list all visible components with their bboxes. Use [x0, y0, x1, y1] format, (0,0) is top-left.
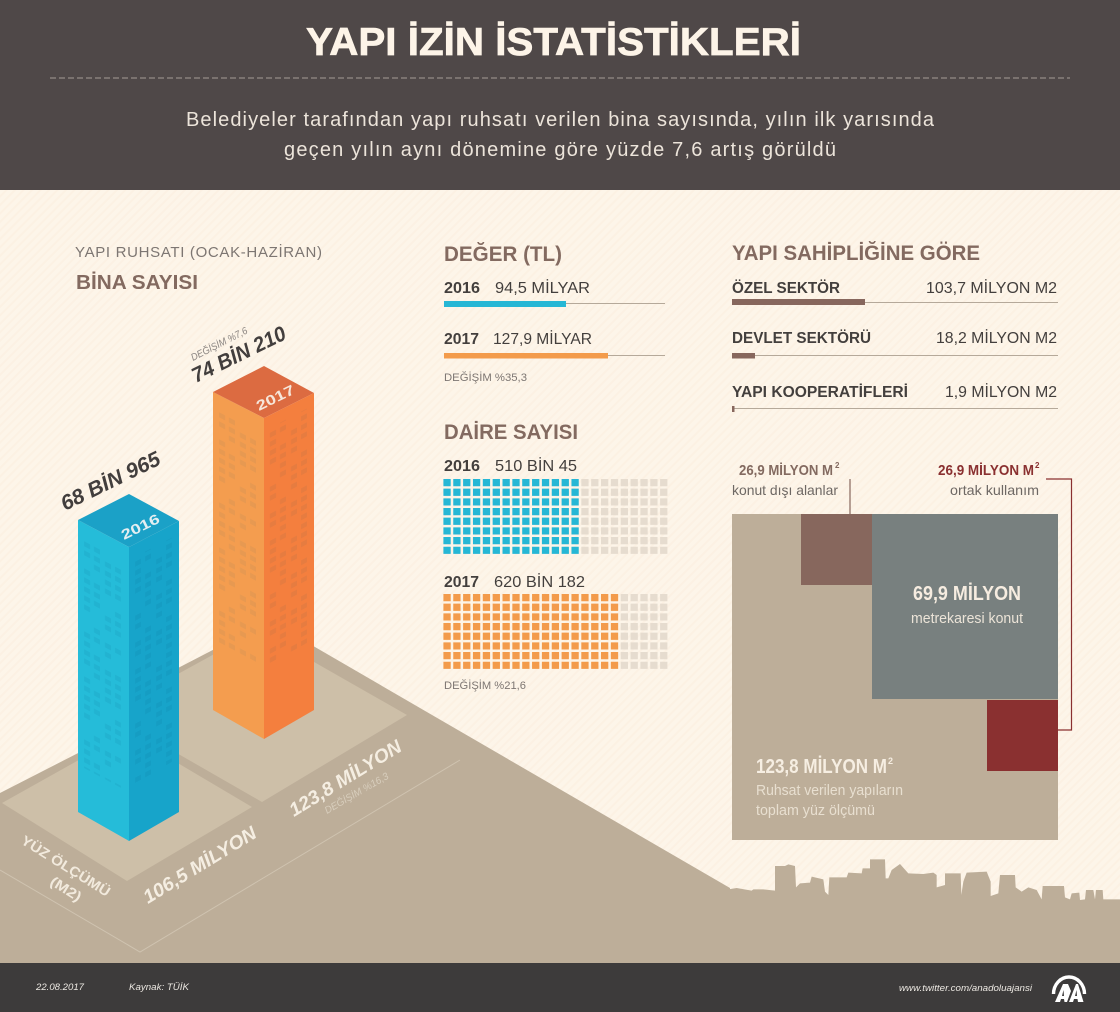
tower 2016 — [78, 494, 179, 841]
value row 2016: 2016 — [444, 280, 480, 297]
footer — [0, 963, 1120, 1012]
non-residential label — [732, 461, 840, 498]
panel: area breakdown — [732, 461, 1072, 840]
total label: 2 — [888, 756, 893, 766]
non-residential label: konut dışı alanlar — [732, 482, 838, 498]
residential square — [872, 514, 1058, 699]
value row 2017: 2017 — [444, 331, 479, 348]
ownership row: state — [732, 328, 1058, 358]
footer: 22.08.2017 — [35, 982, 85, 993]
value row 2017 — [444, 329, 665, 358]
tower 2017 — [213, 366, 314, 739]
non-residential label: 26,9 MİLYON M — [739, 462, 833, 479]
apartment row 2017 — [443, 572, 667, 665]
subtitle: Belediyeler tarafından yapı ruhsatı verilen bina sayısında, yılın ilk yarısında — [186, 109, 935, 131]
common use connector — [1046, 479, 1072, 730]
total label: toplam yüz ölçümü — [756, 802, 875, 819]
common use label: 2 — [1035, 461, 1040, 470]
panel: value in TL: DEĞER (TL) — [444, 242, 562, 266]
value change: DEĞİŞİM %35,3 — [444, 371, 527, 384]
footer: www.twitter.com/anadoluajansi — [899, 983, 1033, 994]
panel: ownership: YAPI SAHİPLİĞİNE GÖRE — [732, 241, 980, 265]
skyline silhouette — [720, 859, 1120, 963]
panel: ownership — [732, 241, 1058, 412]
non-residential square — [801, 514, 872, 585]
common use square — [987, 700, 1058, 771]
ground value 2017: 123,8 MİLYON — [286, 736, 407, 821]
apartment row 2016 — [443, 456, 667, 550]
title: YAPI İZİN İSTATİSTİKLERİ — [306, 21, 801, 64]
value row 2017: 127,9 MİLYAR — [493, 329, 592, 348]
ground change: DEĞİŞİM %16,3 — [322, 769, 391, 817]
building count heading — [75, 243, 322, 294]
building count heading: BİNA SAYISI — [76, 271, 198, 294]
ground label: yüz ölçümü: (M2) — [47, 873, 85, 905]
ground value 2016: 106,5 MİLYON — [140, 822, 262, 908]
total label — [756, 755, 903, 819]
subtitle: geçen yılın aynı dönemine göre yüzde 7,6 artış görüldü — [284, 139, 836, 161]
common use label — [938, 461, 1040, 498]
year 2017: 2017 — [253, 381, 297, 414]
building count heading: YAPI RUHSATI (OCAK-HAZİRAN) — [75, 243, 322, 261]
value row 2016 — [444, 278, 665, 307]
apartment row 2017: 2017 — [444, 574, 479, 591]
value row 2016: 94,5 MİLYAR — [495, 278, 590, 297]
residential square: 69,9 MİLYON — [913, 582, 1021, 605]
ownership row: state: DEVLET SEKTÖRÜ — [732, 330, 871, 347]
non-residential label: 2 — [835, 461, 840, 470]
panel: apartment count — [443, 421, 667, 692]
ownership row: cooperatives: YAPI KOOPERATİFLERİ — [732, 384, 908, 401]
residential square: metrekaresi konut — [911, 610, 1024, 627]
panel: value in TL — [444, 242, 665, 384]
ownership row: cooperatives — [732, 382, 1058, 412]
ownership row: private: ÖZEL SEKTÖR — [732, 280, 840, 297]
non-residential connector — [849, 479, 851, 514]
ground label: yüz ölçümü: YÜZ ÖLÇÜMÜ — [18, 832, 113, 900]
ownership row: cooperatives: 1,9 MİLYON M2 — [945, 382, 1057, 401]
apartment row 2016: 510 BİN 45 — [495, 456, 577, 475]
apartment change: DEĞİŞİM %21,6 — [444, 679, 526, 692]
panel: apartment count: DAİRE SAYISI — [444, 421, 578, 444]
footer: Kaynak: TÜİK — [129, 982, 190, 993]
apartment row 2016: 2016 — [444, 458, 480, 475]
common use label: ortak kullanım — [950, 482, 1039, 498]
tower change: DEĞİŞİM %7,6 — [188, 324, 250, 364]
ownership row: private — [732, 278, 1058, 305]
apartment row 2017: 620 BİN 182 — [494, 572, 585, 591]
ownership row: state: 18,2 MİLYON M2 — [936, 328, 1057, 347]
total label: 123,8 MİLYON M — [756, 755, 887, 778]
subtitle — [186, 109, 935, 161]
ground with skyline — [0, 621, 1120, 963]
tower value 2017: 74 BİN 210 — [188, 322, 290, 387]
ownership row: private: 103,7 MİLYON M2 — [926, 278, 1057, 297]
header band — [0, 0, 1120, 190]
common use label: 26,9 MİLYON M — [938, 462, 1034, 479]
year 2016: 2016 — [118, 510, 162, 543]
tower value 2016: 68 BİN 965 — [57, 447, 165, 515]
total label: Ruhsat verilen yapıların — [756, 782, 903, 799]
icon: agency logo — [1054, 977, 1084, 1002]
